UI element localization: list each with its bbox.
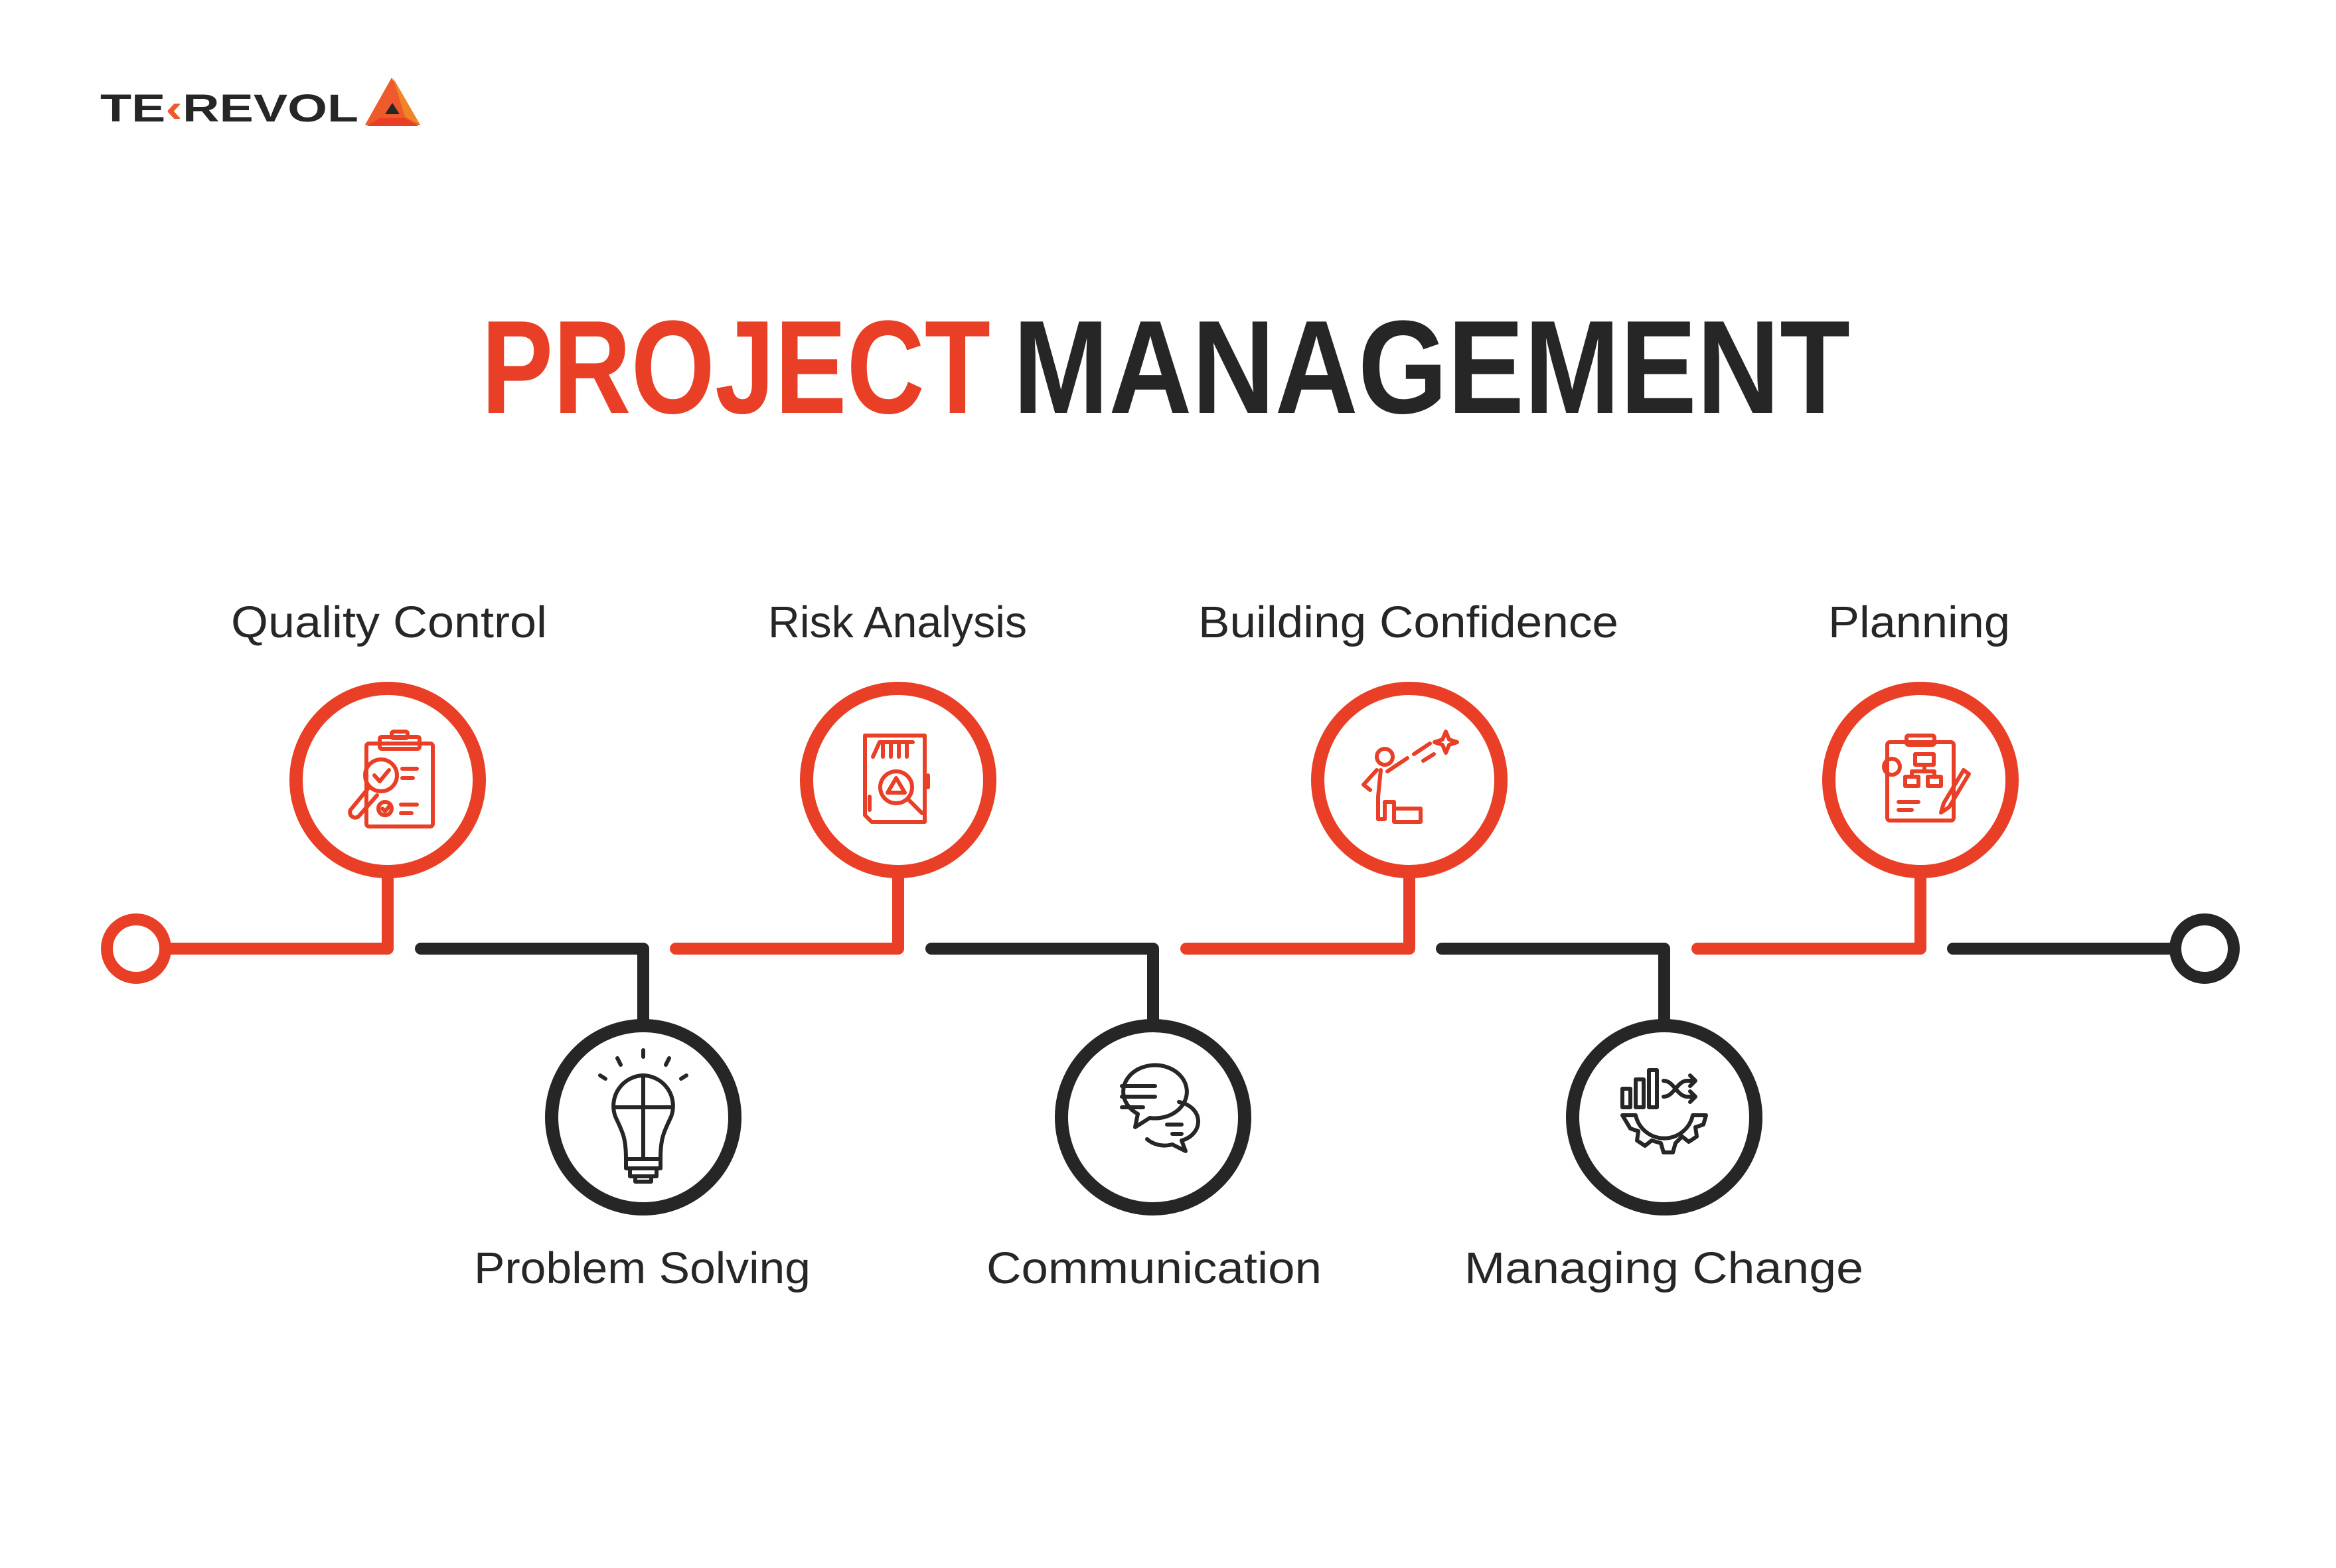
icon: risk report <box>865 736 928 822</box>
label: Managing Change <box>1464 1243 1863 1293</box>
label: Problem Solving <box>474 1243 811 1293</box>
node: Planning <box>1828 597 2012 872</box>
node: Communication <box>986 1026 1322 1293</box>
node: Risk Analysis <box>768 597 1027 872</box>
icon: chat bubbles <box>1122 1065 1198 1151</box>
label: Quality Control <box>231 597 547 647</box>
node: Quality Control <box>231 597 547 872</box>
icon: clipboard with magnifier <box>350 732 433 826</box>
label: Risk Analysis <box>768 597 1027 647</box>
label: Planning <box>1828 597 2010 647</box>
start node <box>107 919 165 978</box>
title: PROJECT <box>481 293 990 441</box>
title: MANAGEMENT <box>1013 293 1850 441</box>
logo: TE ‹REVOL <box>100 87 358 130</box>
icon: person reaching star <box>1363 732 1457 822</box>
icon: chart with gear <box>1622 1070 1706 1152</box>
label: Building Confidence <box>1198 597 1618 647</box>
timeline <box>171 878 2169 1019</box>
end node <box>2175 919 2234 978</box>
title <box>481 293 1850 441</box>
icon: lightbulb puzzle <box>600 1050 686 1182</box>
logo <box>100 78 420 130</box>
node: Managing Change <box>1464 1026 1863 1293</box>
label: Communication <box>986 1243 1322 1293</box>
node: Problem Solving <box>474 1026 811 1293</box>
node: Building Confidence <box>1198 597 1618 872</box>
icon: planning board <box>1884 736 1969 821</box>
